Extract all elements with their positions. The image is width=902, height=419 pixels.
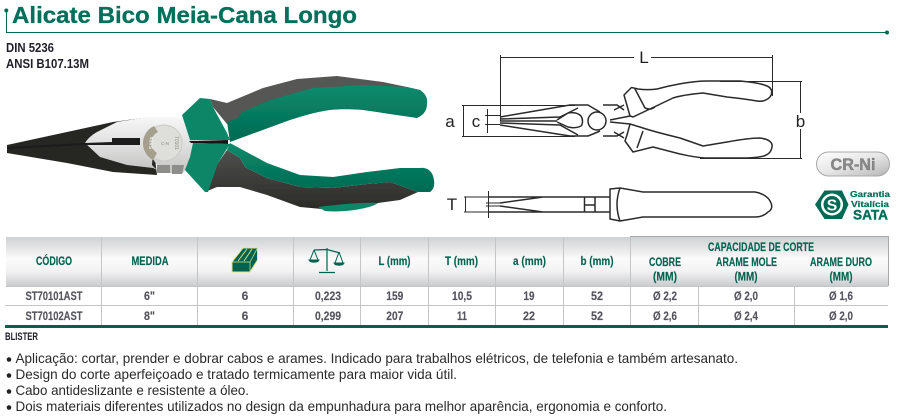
header labels: T (mm) [445,254,478,268]
row: ST70101AST: 0,223 [315,289,341,303]
label a: a [445,112,455,131]
header labels: L (mm) [378,254,411,268]
pliers photo: C-N [161,141,169,146]
row: ST70101AST: 6" [144,289,155,303]
row: ST70101AST: Ø 2,2 [653,289,677,303]
header labels: CAPACIDADE DE CORTE [708,240,814,254]
header labels: (MM) [653,270,677,284]
row: ST70102AST: Ø 2,0 [829,309,853,323]
row: ST70101AST: 10,5 [452,289,472,303]
table header background [6,237,888,286]
row: ST70102AST: 11 [457,309,467,323]
row: ST70101AST [26,289,853,303]
lower handle dark [205,150,418,210]
dimension c [485,109,500,133]
title rule [4,8,889,34]
warranty text: Garantia [850,189,890,199]
header labels: CÓDIGO [36,253,72,268]
row: ST70102AST: ST70102AST [26,309,83,323]
badge: SATA lifetime warranty: SATA [853,206,888,222]
label L: L [639,48,649,67]
upper collar [182,98,230,140]
feature bullet list: Dois materiais diferentes utilizados no design da empunhadura para melhor aparência, ergonomia e conforto. [16,398,667,414]
standards text [6,41,89,71]
badge: CR-Ni [816,152,890,176]
pivot stamp [146,125,182,161]
feature bullet list [7,350,738,414]
lower handle green [227,143,434,192]
row: ST70102AST: 207 [386,309,404,323]
row: ST70101AST: 19 [524,289,535,303]
row: ST70101AST: ST70101AST [26,289,83,303]
upper handle grey [210,76,420,124]
dimension b [700,81,802,159]
upper handle green [227,85,427,142]
feature bullet list: Aplicação: cortar, prender e dobrar cabos e arames. Indicado para trabalhos elétricos, de telefonia e também artesanato. [16,350,738,366]
title: Alicate Bico Meia-Cana Longo [12,2,357,28]
jaw slit [7,138,140,149]
header labels: a (mm) [513,254,546,268]
lower collar [185,143,230,192]
pliers photo: 70101 [173,136,179,150]
label b [795,113,807,129]
technical drawing: front view: b [796,112,805,131]
badge: SATA lifetime warranty: S [827,198,838,214]
dimension a [462,105,575,137]
pliers photo: SATA [148,136,156,150]
row: ST70101AST: Ø 1,6 [829,289,853,303]
packaging label: BLISTER [5,331,38,343]
silver joint [147,117,195,173]
feature bullet list: Cabo antideslizante e resistente a óleo. [16,382,249,398]
row: ST70102AST: Ø 2,6 [653,309,677,323]
row: ST70101AST: 52 [591,289,603,303]
row: ST70102AST: 6 [242,309,249,323]
header labels: ARAME DURO [810,255,872,269]
standards text: ANSI B107.13M [6,57,89,71]
header labels: b (mm) [580,254,614,268]
technical drawing: front view [445,48,807,159]
upper handle outline [624,81,772,117]
technical drawing: side view [447,188,772,221]
standards text: DIN 5236 [6,41,54,55]
grip strip [318,203,378,211]
black nose [7,117,157,175]
row: ST70102AST [26,309,853,323]
dimension L [500,55,772,121]
feature bullet list: Design do corte aperfeiçoado e tratado termicamente para maior vida útil. [16,366,457,382]
row: ST70102AST: 22 [523,309,535,323]
row: ST70102AST: 0,299 [315,309,341,323]
lower handle outline [625,124,772,158]
table bottom rule [5,325,888,328]
row: ST70101AST: Ø 2,0 [734,289,758,303]
icon: package box [232,248,258,272]
badge: SATA lifetime warranty: Vitalícia [851,199,889,209]
badge: SATA lifetime warranty [815,189,890,222]
badge: CR-Ni: CR-Ni [830,155,876,174]
logo hexagon [815,190,848,219]
header labels: COBRE [649,255,681,269]
row: ST70102AST: 52 [591,309,603,323]
row: ST70101AST: 6 [242,289,249,303]
silver jaw [85,117,157,170]
label c: c [472,112,481,131]
row: ST70101AST: 159 [386,289,404,303]
icon: weighing scale [309,248,344,272]
header labels: ARAME MOLE [716,255,777,269]
row: ST70102AST: 8" [144,309,155,323]
row: ST70102AST: Ø 2,4 [734,309,758,323]
header labels: (MM) [830,270,853,284]
label T: T [447,195,457,214]
header labels [36,240,872,284]
jaws outline [500,105,630,138]
pliers photo [7,76,434,211]
specification table [5,236,889,328]
header labels: (MM) [734,270,758,284]
header labels: MEDIDA [132,254,169,268]
